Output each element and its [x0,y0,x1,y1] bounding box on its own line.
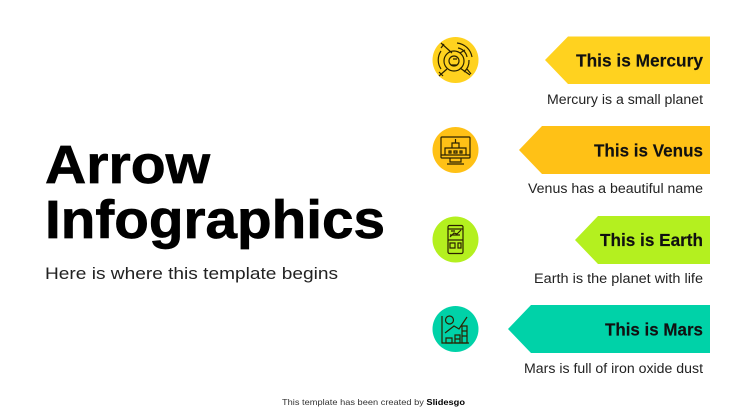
item: Venus [432,126,710,196]
subtitle: Here is where this template begins [45,264,338,283]
text: Venus: Venus has a beautiful name [528,181,703,196]
arrow: Earth [575,216,710,264]
title [45,135,385,250]
item: Earth [432,216,710,286]
arrow: Mercury [545,36,710,84]
icon: Venus monitor [432,127,478,173]
title: Arrow [45,135,211,195]
text: Earth: Earth is the planet with life [534,271,703,286]
heading: Mercury: This is Mercury [576,50,703,70]
heading: Earth: This is Earth [600,230,703,250]
arrow: Venus [519,126,710,174]
item: Mars [432,305,710,376]
icon: Earth phone [432,216,478,262]
footer credit: This template has been created by Slidesgo [282,397,465,407]
text: Mercury: Mercury is a small planet [547,92,703,107]
heading: Venus: This is Venus [594,140,703,160]
item: Mercury [432,36,710,107]
icon: Mercury orbit [432,37,478,83]
text: Mars: Mars is full of iron oxide dust [524,361,703,376]
arrow: Mars [508,305,710,353]
icon: Mars growth chart [432,306,478,352]
title: Infographics [45,190,385,250]
heading: Mars: This is Mars [605,320,703,340]
